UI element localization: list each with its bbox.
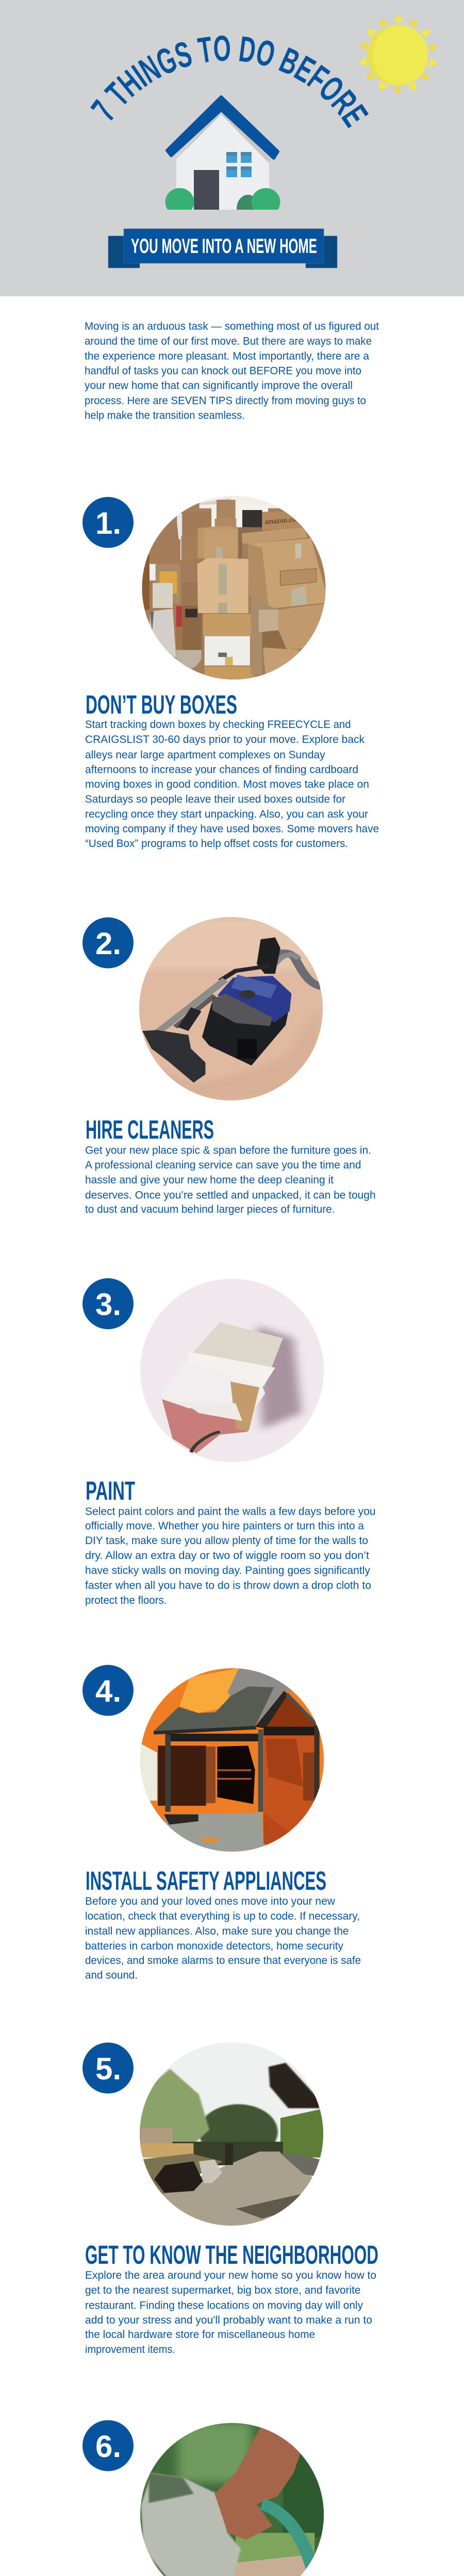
body text: Get your new place spic & span before the furniture goes in. [85, 1145, 371, 1156]
body text: “Used Box” programs to help offset costs for customers. [85, 838, 348, 850]
badge: number 5 [82, 2042, 134, 2094]
panel: tip 6 [82, 2420, 324, 2576]
badge: number 2: 2. [95, 926, 121, 961]
intro text block: your new home that can significantly improve the overall [85, 380, 353, 392]
body text: CRAIGSLIST 30-60 days prior to your move. Explore back [85, 734, 364, 745]
badge: number 6: 6. [95, 2429, 121, 2464]
body text: faster when all you have to do is throw down a drop cloth to [85, 1580, 371, 1591]
body text: batteries in carbon monoxide detectors, home security [85, 1940, 343, 1952]
body text: restaurant. Finding these locations on moving day will only [85, 2300, 363, 2311]
panel: tip 3 [82, 1277, 376, 1606]
title: arched heading: 7 THINGS TO DO BEFORE [90, 36, 369, 128]
heading: DON’T BUY BOXES [86, 690, 237, 719]
body text: Start tracking down boxes by checking FREECYCLE and [85, 719, 351, 731]
panel: tip 4 [82, 1665, 361, 1981]
badge: number 3 [82, 1278, 134, 1329]
badge: number 4 [82, 1665, 134, 1716]
body text: recycling once they start unpacking. Also, you can ask your [85, 808, 368, 820]
panel: tip 2 [82, 912, 376, 1215]
body text: get to the nearest supermarket, big box store, and favorite [85, 2284, 361, 2296]
body text: deserves. Once you’re settled and unpacked, it can be tough [85, 1189, 376, 1201]
body text: and sound. [85, 1969, 138, 1981]
photo: vacuum cleaner on carpet [139, 917, 323, 1100]
body text: moving boxes in good condition. Most moves take place on [85, 778, 369, 790]
intro text block: Moving is an arduous task — something most of us figured out [85, 320, 379, 332]
badge: number 1: 1. [95, 506, 121, 540]
icon: sun [358, 14, 438, 95]
badge: number 1 [82, 497, 134, 548]
body text: the local hardware store for miscellaneous home [85, 2329, 315, 2341]
badge: number 4: 4. [95, 1674, 121, 1708]
body text: install new appliances. Also, make sure you change the [85, 1925, 349, 1937]
ribbon banner [108, 229, 337, 268]
photo: stacked cardboard boxes [139, 495, 327, 683]
header panel [0, 0, 464, 296]
body text: afternoons to increase your chances of finding cardboard [85, 764, 358, 776]
body text: alleys near large apartment complexes on Sunday [85, 749, 325, 761]
panel: tip 1 [82, 495, 379, 850]
body text [85, 1505, 376, 1606]
badge: number 2 [82, 917, 134, 969]
intro text block: help make the transition seamless. [85, 410, 245, 421]
photo: burning house [138, 1667, 326, 1855]
body text: Saturdays so people leave their used boxes outside for [85, 793, 345, 805]
body text: location, check that everything is up to code. If necessary, [85, 1910, 360, 1922]
ribbon text: YOU MOVE INTO A NEW HOME [131, 235, 317, 258]
body text: devices, and smoke alarms to ensure that everyone is safe [85, 1955, 361, 1967]
body text: improvement items. [85, 2344, 175, 2355]
body text: Explore the area around your new home so you know how to [85, 2269, 376, 2281]
body text: officially move. Whether you hire painters or turn this into a [85, 1520, 364, 1532]
body text [85, 1145, 376, 1215]
body text: have sticky walls on moving day. Painting goes significantly [85, 1565, 370, 1577]
body text [85, 1895, 361, 1981]
intro text block [85, 320, 379, 421]
body text: hassle and give your new home the deep cleaning it [85, 1174, 334, 1186]
panel: tip 5 [82, 2039, 378, 2355]
heading: PAINT [86, 1476, 135, 1505]
icon: house [165, 97, 280, 223]
body text: DIY task, make sure you allow plenty of time for the walls to [85, 1535, 368, 1547]
badge: number 6 [82, 2420, 134, 2471]
body text: dry. Allow an extra day or two of wiggle room so you don’t [85, 1550, 369, 1562]
heading: HIRE CLEANERS [86, 1115, 214, 1144]
photo: paint brush [136, 1277, 328, 1464]
body text: to dust and vacuum behind larger pieces of furniture. [85, 1204, 335, 1215]
photo: hand holding garden hose [136, 2421, 328, 2576]
intro text block: process. Here are SEVEN TIPS directly from moving guys to [85, 395, 366, 407]
body text [85, 2269, 376, 2355]
body text: A professional cleaning service can save you the time and [85, 1159, 361, 1171]
intro text block: handful of tasks you can knock out BEFORE you move into [85, 365, 361, 377]
intro text block: the experience more pleasant. Most importantly, there are a [85, 350, 369, 362]
photo: stacked cardboard boxes: amazon.com [264, 515, 302, 526]
body text: Select paint colors and paint the walls a few days before you [85, 1505, 376, 1518]
body text [85, 719, 379, 850]
badge: number 3: 3. [95, 1287, 121, 1322]
body text: add to your stress and you'll probably want to make a run to [85, 2314, 372, 2326]
photo: neighborhood street [136, 2039, 328, 2227]
body text: protect the floors. [85, 1595, 167, 1606]
badge: number 5: 5. [95, 2052, 121, 2086]
body text: moving company if they have used boxes. Some movers have [85, 823, 379, 835]
body text: Before you and your loved ones move into your new [85, 1895, 336, 1907]
intro text block: around the time of our first move. But there are ways to make [85, 335, 372, 347]
